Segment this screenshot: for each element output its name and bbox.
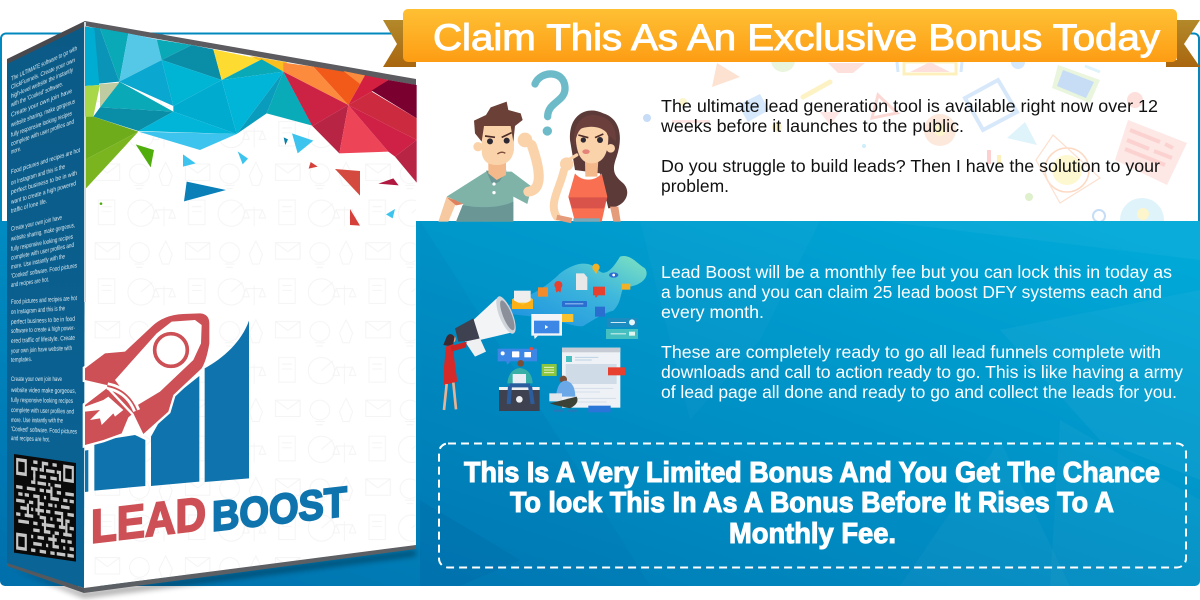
polygon art xyxy=(85,27,417,226)
blue section text: Lead Boost will be a monthly fee but you can lock this in today as xyxy=(661,262,1172,282)
spine text: website video make gorgeous, xyxy=(10,387,76,395)
social chips xyxy=(606,318,638,339)
title text: Claim This As An Exclusive Bonus Today xyxy=(433,16,1160,58)
logo wordmark BOOST: BOOST xyxy=(212,478,347,540)
man xyxy=(438,102,539,222)
QR code xyxy=(14,454,76,562)
spine text: 'Cooked' software. Food pictures xyxy=(11,262,78,280)
colour blob xyxy=(505,256,647,326)
product box xyxy=(7,20,417,598)
spine text: more. Use instantly with the xyxy=(11,253,65,271)
spine text: Food pictures and recipes are hot xyxy=(11,295,77,306)
man with laptop xyxy=(549,376,577,411)
spine text: ered traffic of lifestyle. Create xyxy=(11,335,75,345)
spine text: Create your own join have xyxy=(11,88,72,119)
callout text: Monthly Fee. xyxy=(729,518,896,550)
spine text: want to create a high powered xyxy=(10,180,76,206)
spine text: high-level website the instantly xyxy=(11,67,73,100)
rocket and bars logo xyxy=(85,313,249,492)
illustration: digital marketing megaphone xyxy=(443,256,647,412)
spine text: fully responsive looking recipes xyxy=(11,234,73,253)
video window xyxy=(531,314,562,339)
callout text: This Is A Very Limited Bonus And You Get The Chance xyxy=(464,457,1160,489)
spine text: complete with user profiles and xyxy=(11,407,74,416)
panel: white intro card with blue border xyxy=(1,34,1199,242)
spine text: Create your own join have xyxy=(11,376,62,383)
ribbon tail right xyxy=(1166,20,1200,67)
spine text: website sharing, make gorgeous, xyxy=(10,222,75,243)
spine text: complete with user profiles and xyxy=(11,118,74,148)
spine text: with the 'Cooked' software. xyxy=(10,81,63,109)
spine text: on Instagram and this is the xyxy=(11,305,65,316)
intro text: problem. xyxy=(661,176,729,196)
blue section text: a bonus and you can claim 25 lead boost DFY systems each and xyxy=(661,282,1162,302)
spine text: perfect business to be in with xyxy=(11,170,77,196)
spine text: more. xyxy=(11,146,21,156)
spine text: Create your own join have xyxy=(11,214,62,233)
spine text: templates. xyxy=(11,356,32,364)
floating icons xyxy=(512,264,630,322)
spine text: Food pictures and recipes are hot xyxy=(11,147,80,176)
blue section text: of lead page all done and ready to go and collect the leads for you. xyxy=(661,382,1177,402)
spine text: fully responsive looking recipes xyxy=(11,397,74,405)
intro text: Do you struggle to build leads? Then I have the solution to your xyxy=(661,156,1160,176)
spine text: on Instagram and this is the xyxy=(11,163,65,187)
box shadow xyxy=(10,550,416,598)
blue section text: These are completely ready to go all lead funnels complete with xyxy=(661,342,1161,362)
spine text: traffic of lone life. xyxy=(11,198,47,215)
spine text: and recipes are hot. xyxy=(11,276,49,289)
woman in red dress xyxy=(443,334,467,410)
spine text: perfect business to be in food xyxy=(11,316,75,326)
box spine xyxy=(7,21,85,593)
like bubble xyxy=(498,347,537,365)
man on video box xyxy=(499,360,540,411)
decorative pastel shapes xyxy=(643,62,1187,221)
box front xyxy=(84,20,417,593)
spine text: more. Use instantly with the xyxy=(11,417,63,425)
falling triangles xyxy=(136,144,154,167)
intro text xyxy=(660,96,1160,196)
blue section text: downloads and call to action ready to go. This is like having a army xyxy=(661,362,1183,382)
spine text: and recipes are hot. xyxy=(11,435,50,444)
callout: limited bonus dashed box xyxy=(439,444,1186,568)
blue section text xyxy=(661,262,1183,402)
spine text: software to create a high power- xyxy=(11,325,75,335)
panel: blue lower section xyxy=(0,221,1200,586)
spine text: your own join have website with xyxy=(11,345,72,355)
intro text: weeks before it launches to the public. xyxy=(660,116,964,136)
spine text: fully responsive looking recipes xyxy=(11,110,72,139)
web page xyxy=(542,348,625,412)
ribbon tail left xyxy=(383,20,416,67)
spine text: The ULTIMATE software to go with xyxy=(11,45,77,83)
intro text: The ultimate lead generation tool is available right now over 12 xyxy=(661,96,1158,116)
logo wordmark LEAD: LEAD xyxy=(91,486,206,553)
callout text: To lock This In As A Bonus Before It Rises To A xyxy=(510,487,1114,519)
blue section text: every month. xyxy=(661,302,764,322)
megaphone xyxy=(455,294,520,357)
callout text xyxy=(464,457,1160,550)
spine text: 'Cooked' software. Food pictures xyxy=(11,426,78,436)
spine text: website sharing, make gorgeous xyxy=(10,98,75,129)
title banner xyxy=(403,9,1177,62)
spine text xyxy=(10,45,80,444)
question mark xyxy=(535,74,565,136)
illustration: puzzled man and woman xyxy=(438,74,627,222)
spine text: complete with user profiles and xyxy=(11,242,74,262)
spine text: ClickFunnels. Create your own xyxy=(11,57,75,91)
woman xyxy=(554,110,627,222)
